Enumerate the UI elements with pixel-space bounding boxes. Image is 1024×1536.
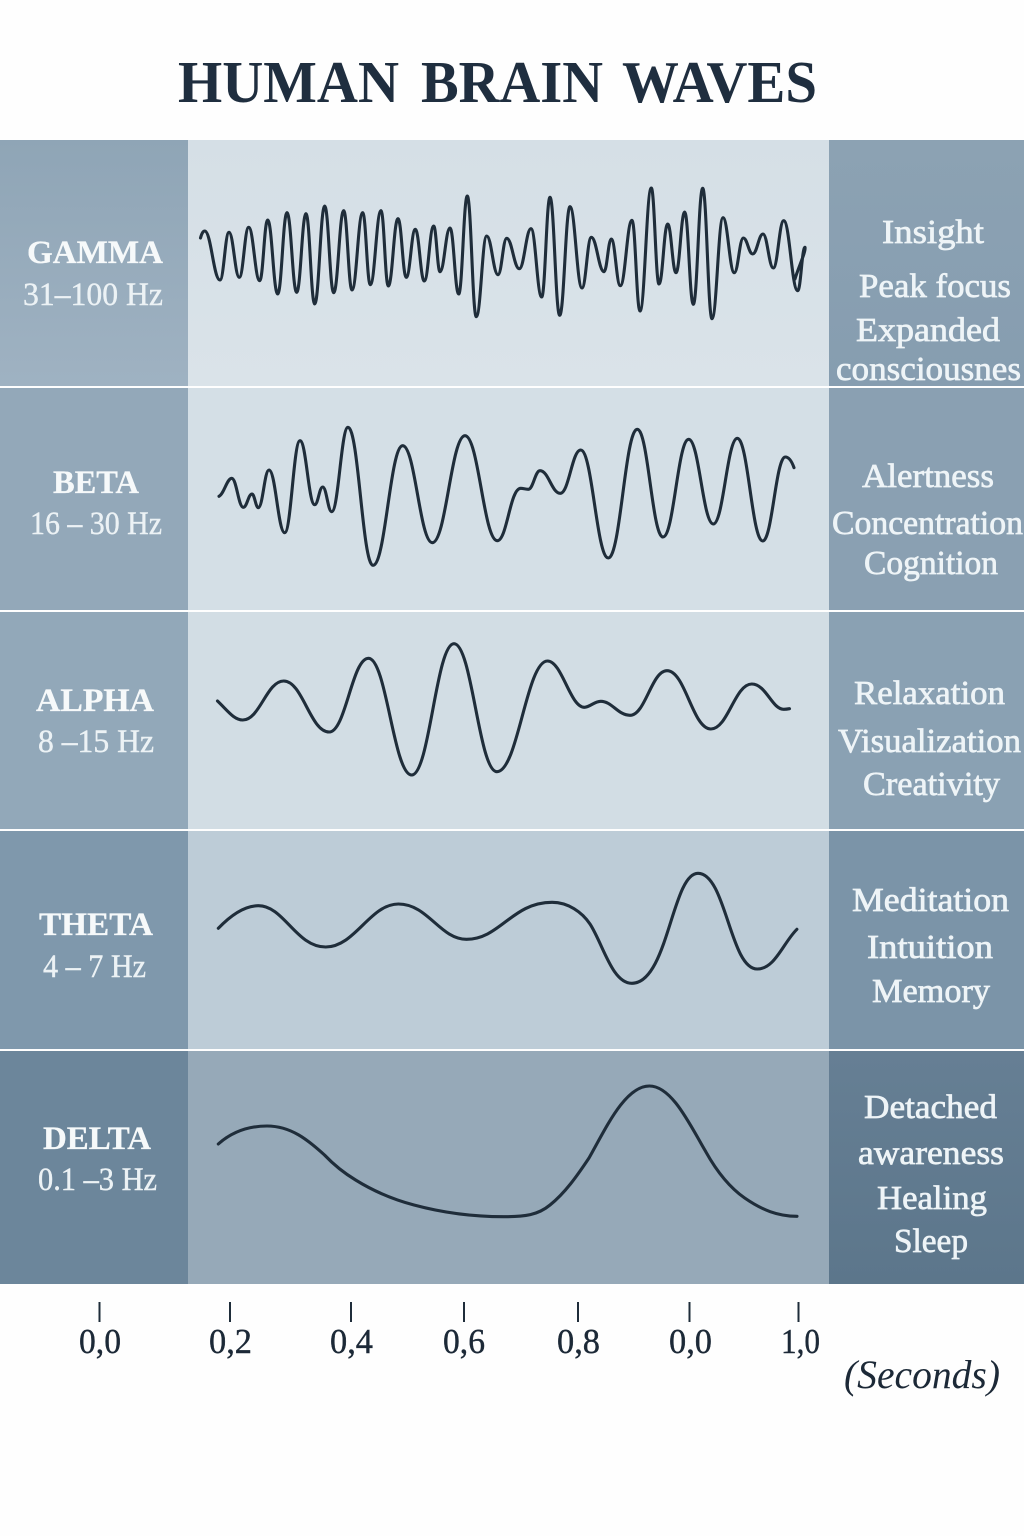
beta waveform [219,427,794,565]
theta waveform [218,873,797,983]
panel: gamma row [0,140,1024,388]
axis tick labels: 0,6 [443,1322,485,1361]
gamma frequency: 31–100 Hz [23,277,163,313]
gamma states: Peak focus [859,268,1011,305]
theta name: THETA [39,907,153,943]
gamma states [836,214,1021,388]
alpha states: Creativity [863,766,1000,803]
theta frequency: 4 – 7 Hz [43,949,146,985]
delta frequency: 0.1 –3 Hz [38,1162,157,1198]
axis tick labels: 0,0 [79,1322,121,1361]
alpha states: Visualization [838,723,1021,760]
axis tick labels: 0,2 [209,1322,252,1361]
delta states: awareness [858,1135,1004,1172]
axis tick labels: 0,4 [330,1322,373,1361]
alpha frequency: 8 –15 Hz [38,724,154,760]
delta name: DELTA [43,1121,151,1157]
theta states cell [829,831,1024,1049]
alpha wave cell [188,612,829,829]
gamma waveform [200,188,805,319]
delta wave cell [188,1051,829,1284]
alpha name: ALPHA [36,683,154,719]
delta states: Sleep [894,1223,968,1260]
alpha label cell [0,612,188,829]
title: WAVES [622,49,817,115]
alpha states: Relaxation [854,675,1005,712]
title: HUMAN [178,49,399,115]
panel: delta row [0,1051,1024,1284]
alpha states [838,675,1021,803]
delta states cell [829,1051,1024,1284]
gamma label cell [0,140,188,386]
time axis [79,1302,1000,1397]
gamma states: consciousnes [836,351,1021,388]
axis tick labels [79,1322,820,1361]
panel: alpha row [0,612,1024,829]
gamma states: Expanded [856,312,1000,349]
beta label cell [0,388,188,610]
theta states [852,882,1009,1010]
delta label cell [0,1051,188,1284]
beta states [832,458,1023,582]
beta frequency: 16 – 30 Hz [30,506,162,542]
beta name: BETA [53,465,139,501]
delta waveform [218,1086,797,1217]
beta states: Alertness [862,458,994,495]
delta states: Healing [877,1180,987,1217]
theta label cell [0,831,188,1049]
theta wave cell [188,831,829,1049]
gamma states: Insight [882,214,985,251]
theta states: Memory [872,973,990,1010]
alpha waveform [218,644,790,775]
gamma name: GAMMA [27,235,163,271]
panel: beta row [0,388,1024,610]
delta states: Detached [864,1089,997,1126]
axis unit label: (Seconds) [844,1352,1000,1397]
axis tick marks [100,1302,798,1322]
beta states: Concentration [832,505,1023,542]
theta states: Meditation [852,882,1009,919]
alpha states cell [829,612,1024,829]
beta wave cell [188,388,829,610]
delta states [858,1089,1004,1260]
axis tick labels: 0,0 [669,1322,712,1361]
theta states: Intuition [867,929,993,966]
gamma wave cell [188,140,829,386]
gamma states cell [829,140,1024,386]
beta states: Cognition [864,545,998,582]
panel: theta row [0,831,1024,1049]
beta states cell [829,388,1024,610]
axis tick labels: 0,8 [557,1322,600,1361]
axis tick labels: 1,0 [781,1322,820,1361]
title: BRAIN [421,49,603,115]
title [178,49,817,115]
